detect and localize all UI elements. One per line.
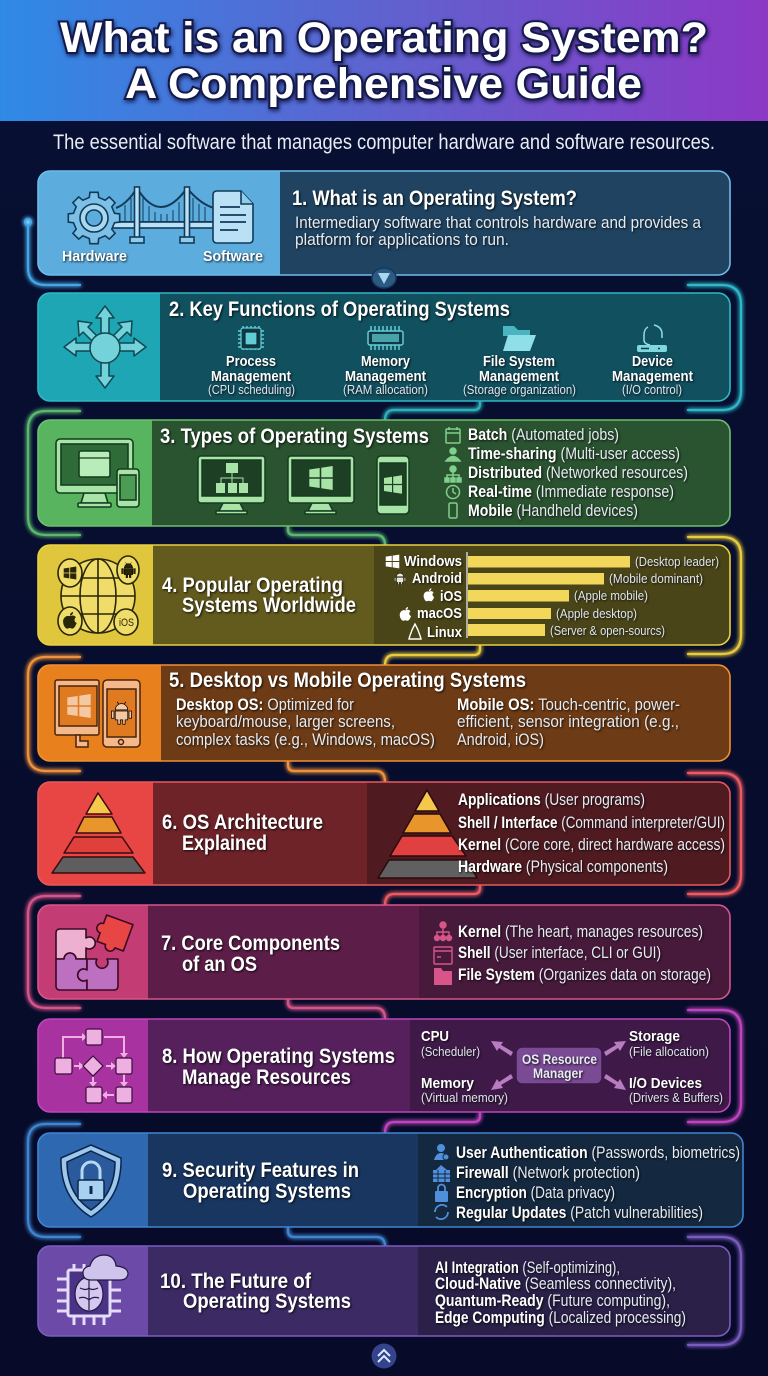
diagram: OS resource manager: [421, 1028, 723, 1105]
heading and description: platform for applications to run.: [295, 230, 509, 249]
heading: Explained: [182, 832, 267, 855]
panel 4: popular OS: [38, 545, 730, 645]
heading: 4. Popular Operating: [162, 574, 343, 597]
icon labels: Software: [203, 248, 263, 265]
panel 3: types of OS: [38, 420, 730, 526]
OS monitor: windows: [288, 456, 354, 514]
function: device management: Management: [612, 368, 693, 385]
icon labels: [62, 248, 263, 265]
heading: [162, 1159, 359, 1203]
bar chart: OS popularity: (Desktop leader): [635, 554, 719, 569]
chart: layered pyramid: [378, 790, 477, 878]
title: What is an Operating System?: [60, 14, 708, 62]
icon: flowchart: [55, 1029, 132, 1103]
text: mobile OS: Android, iOS): [457, 730, 544, 749]
text: mobile OS: efficient, sensor integration (e.g.,: [457, 712, 679, 731]
panel 6: architecture: [38, 782, 730, 885]
function: device management: (I/O control): [622, 382, 682, 397]
text: desktop OS: Desktop OS: Optimized for: [176, 695, 354, 714]
diagram: OS resource manager: (File allocation): [629, 1044, 709, 1059]
OS monitor: batch tree: [198, 456, 265, 514]
diagram: OS resource manager: Manager: [533, 1065, 583, 1081]
list: security features: [456, 1143, 740, 1222]
panel 9: security: [38, 1133, 743, 1227]
panel 7: core components: [38, 905, 730, 999]
heading: [162, 1045, 395, 1089]
connector: panels 9 to 10: [288, 1227, 385, 1246]
connector: panel 8 right: [688, 1010, 741, 1122]
function: file system management: [463, 326, 576, 397]
list: security features: Regular Updates (Patch vulnerabilities): [456, 1203, 703, 1222]
list: OS types: Batch (Automated jobs): [468, 425, 619, 444]
heading: 6. OS Architecture: [162, 811, 323, 834]
function: memory management: [343, 326, 428, 397]
connector: panels 1 to 2 right: [688, 285, 741, 410]
connector: panel 7 left: [28, 896, 80, 1008]
icon: shield with padlock: [61, 1145, 121, 1217]
connector: panels 3 to 4: [288, 526, 385, 545]
OS phone: windows: [377, 456, 409, 514]
text: desktop OS: keyboard/mouse, larger screens,: [176, 712, 395, 731]
heading: 2. Key Functions of Operating Systems: [169, 298, 510, 321]
diagram: OS resource manager: (Drivers & Buffers): [629, 1090, 723, 1105]
list: layers: Hardware (Physical components): [458, 857, 668, 876]
heading: of an OS: [182, 953, 257, 976]
panel 10: future of OS: [38, 1246, 730, 1336]
heading: Operating Systems: [183, 1290, 351, 1313]
arrow badge: down: [372, 268, 396, 288]
diagram: OS resource manager: Memory: [421, 1075, 475, 1092]
connector: panels 5 to 6: [288, 761, 385, 782]
panel 5: desktop vs mobile: [38, 665, 730, 761]
icon: desktop and phone: [55, 680, 140, 747]
connector: panels 4 to 5: [385, 645, 480, 665]
title: A Comprehensive Guide: [125, 60, 642, 108]
connector: panels 8 to 9: [385, 1112, 480, 1133]
connector: panel 6 right: [688, 773, 741, 894]
heading: Systems Worldwide: [182, 594, 356, 617]
panel 2: key functions: [38, 293, 730, 401]
list: future trends: AI Integration (Self-optimizing),: [435, 1258, 620, 1277]
heading: [160, 1270, 351, 1313]
heading: 9. Security Features in: [162, 1159, 359, 1182]
function: device management: [612, 325, 693, 397]
function: device management: Device: [632, 353, 673, 370]
heading: 7. Core Components: [161, 932, 340, 955]
list: future trends: Edge Computing (Localized processing): [435, 1308, 686, 1327]
function: memory management: Management: [345, 368, 426, 385]
icon: pyramid: [52, 793, 145, 873]
arrow badge: back to top: [372, 1344, 396, 1368]
icon: globe with OS logos: [58, 556, 139, 635]
list: future trends: Quantum-Ready (Future computing),: [435, 1291, 670, 1310]
connector: panels 2 to 3: [385, 401, 480, 420]
panel 8: resource management: [38, 1019, 730, 1112]
function: file system management: Management: [479, 368, 559, 385]
icon: radiating arrows: [64, 306, 146, 388]
icon label: iOS: iOS: [119, 617, 134, 629]
heading and description: Intermediary software that controls hardware and provides a: [295, 213, 701, 232]
icon: puzzle pieces: [56, 913, 133, 990]
diagram: OS resource manager: Storage: [629, 1028, 680, 1045]
bar chart: OS popularity: Linux: [427, 624, 463, 641]
heading: 3. Types of Operating Systems: [160, 425, 429, 448]
diagram: OS resource manager: CPU: [421, 1028, 449, 1045]
connector: panels 6 to 7: [385, 885, 480, 905]
bar chart: OS popularity: (Apple mobile): [574, 588, 648, 603]
connector: panel 4 right: [688, 537, 741, 654]
icon labels: Hardware: [62, 248, 127, 265]
list: layers: Applications (User programs): [458, 790, 645, 809]
list: OS types: [468, 425, 688, 520]
connector: start into panel 1: [25, 219, 80, 285]
icon: gear, bridge and document: [68, 187, 253, 244]
text: mobile OS: Mobile OS: Touch-centric, power-: [457, 695, 680, 714]
connector: panel 3 left: [28, 411, 80, 535]
function: process management: [208, 326, 295, 397]
connector: panel 10 right: [688, 1237, 741, 1345]
diagram: OS resource manager: OS Resource: [522, 1051, 597, 1067]
bar chart: OS popularity: [386, 552, 719, 641]
function: memory management: (RAM allocation): [343, 382, 428, 397]
bar chart: OS popularity: macOS: [417, 605, 462, 622]
list: OS types: Real-time (Immediate response): [468, 482, 674, 501]
list: components: Kernel (The heart, manages resources): [458, 922, 703, 941]
heading: 8. How Operating Systems: [162, 1045, 395, 1068]
list: security features: Firewall (Network protection): [456, 1163, 640, 1182]
icon: AI chip and cloud: [57, 1255, 128, 1325]
connector: panel 5 left: [28, 657, 80, 771]
heading: 5. Desktop vs Mobile Operating Systems: [169, 669, 526, 692]
function: memory management: Memory: [361, 353, 411, 370]
connector: panels 7 to 8: [288, 999, 385, 1019]
diagram: OS resource manager: (Scheduler): [421, 1044, 480, 1059]
heading: Operating Systems: [183, 1180, 351, 1203]
icon: devices: [56, 439, 139, 507]
list: layers: Kernel (Core core, direct hardware access): [458, 835, 725, 854]
bar chart: OS popularity: (Mobile dominant): [609, 571, 703, 586]
list: components: Shell (User interface, CLI or GUI): [458, 943, 661, 962]
bar chart: OS popularity: (Server & open-sourcs): [550, 623, 665, 638]
list icons: [433, 1144, 450, 1219]
heading: [161, 932, 340, 976]
list: future trends: Cloud-Native (Seamless connectivity),: [435, 1274, 676, 1293]
function: process management: (CPU scheduling): [208, 382, 295, 397]
list: components: File System (Organizes data on storage): [458, 965, 711, 984]
title: [60, 14, 708, 108]
connector: panel 9 left: [28, 1124, 80, 1237]
text: desktop OS: [176, 695, 435, 749]
heading: [162, 811, 323, 855]
function: process management: Process: [226, 353, 276, 370]
heading: 10. The Future of: [160, 1270, 312, 1293]
function: file system management: (Storage organization): [463, 382, 576, 397]
diagram: OS resource manager: I/O Devices: [629, 1075, 702, 1092]
heading and description: 1. What is an Operating System?: [292, 187, 577, 210]
list: OS types: Time-sharing (Multi-user access): [468, 444, 680, 463]
text: desktop OS: complex tasks (e.g., Windows, macOS): [176, 730, 435, 749]
bar chart: OS popularity: Windows: [404, 553, 462, 570]
list: security features: User Authentication (Passwords, biometrics): [456, 1143, 740, 1162]
list: OS types: Distributed (Networked resources): [468, 463, 688, 482]
bar chart: OS popularity: (Apple desktop): [556, 606, 637, 621]
list: layers: [458, 790, 725, 876]
heading and description: [292, 187, 701, 249]
heading: Manage Resources: [182, 1066, 351, 1089]
list: future trends: [435, 1258, 686, 1327]
list: layers: Shell / Interface (Command interpreter/GUI): [458, 813, 725, 832]
list: components: [458, 922, 711, 984]
function: process management: Management: [211, 368, 291, 385]
heading: [162, 574, 356, 617]
diagram: OS resource manager: (Virtual memory): [421, 1090, 508, 1105]
bar chart: OS popularity: iOS: [440, 588, 462, 605]
list icons: [445, 427, 461, 518]
panel 1: what is an OS: [38, 171, 730, 275]
bar chart: OS popularity: Android: [412, 570, 462, 587]
list icons: [434, 922, 452, 985]
list: security features: Encryption (Data privacy): [456, 1183, 615, 1202]
text: mobile OS: [457, 695, 680, 749]
header band: [0, 0, 768, 121]
list: OS types: Mobile (Handheld devices): [468, 501, 638, 520]
function: file system management: File System: [483, 353, 555, 370]
